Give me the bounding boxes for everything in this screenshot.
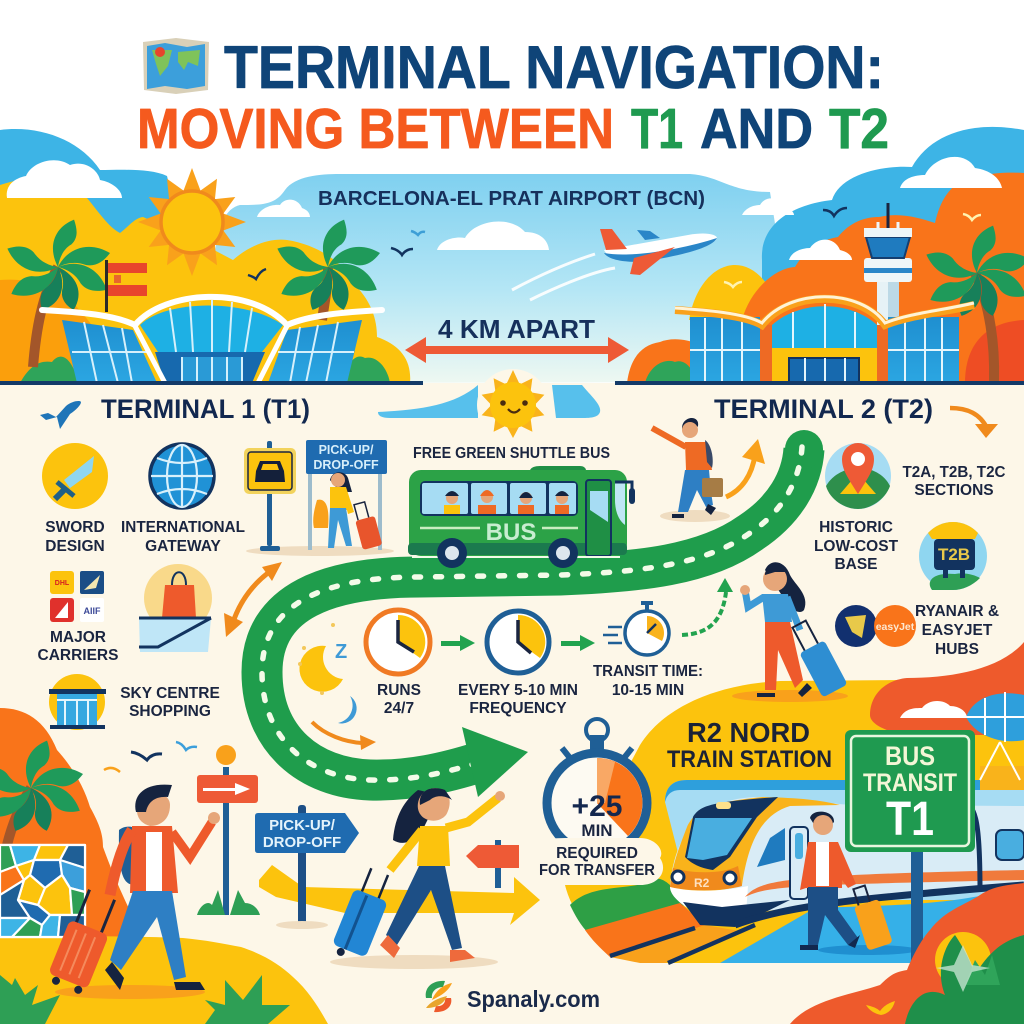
yellow arrow ground [259, 865, 540, 925]
globe dome [966, 692, 1024, 780]
small arrow sign [466, 840, 519, 888]
arrowhead: orange t2 [975, 424, 998, 438]
map icon [143, 38, 209, 94]
pick-up sign top: PICK-UP/ [319, 443, 374, 457]
label: sword design: DESIGN [45, 538, 105, 555]
sky panel [0, 127, 1024, 383]
title: TERMINAL NAVIGATION: [224, 34, 884, 101]
arrow: orange curve [726, 455, 755, 497]
palm bottom left [0, 737, 84, 845]
icon: small plane [40, 401, 81, 429]
bottom right foliage [790, 883, 1024, 1024]
location icon [825, 443, 891, 509]
label: shuttle: FREE GREEN SHUTTLE BUS [413, 445, 610, 462]
label: required [528, 821, 663, 885]
pick-up sign bottom [255, 805, 359, 929]
airplane [512, 229, 717, 300]
birds bottom [104, 742, 197, 772]
label: historic low-cost base: LOW-COST [814, 538, 899, 555]
international gateway icon [150, 444, 214, 508]
title: T1 [631, 97, 683, 161]
label: historic low-cost base: HISTORIC [819, 519, 893, 536]
logo: Spanaly.com [467, 986, 600, 1012]
label: major carriers [38, 629, 118, 664]
label: historic low-cost base: BASE [834, 556, 878, 573]
airline logos: easyJet [876, 621, 915, 633]
label: sword design [45, 519, 105, 555]
heading: r2 nord: R2 NORD [687, 717, 810, 748]
clock 24/7 [366, 610, 430, 674]
label: sky centre [120, 685, 220, 720]
stopwatch [603, 601, 669, 655]
label: runs 24/7: RUNS [377, 682, 421, 699]
icon: train: R2 [694, 876, 710, 890]
title: T2 [829, 97, 889, 161]
sky centre icon [49, 674, 106, 730]
bus transit sign: T1 [886, 793, 934, 846]
icon: bus: BUS [486, 519, 536, 546]
train panel [565, 642, 1024, 963]
label: international gateway: GATEWAY [145, 538, 222, 555]
stopwatch large [547, 719, 647, 853]
label: sword design: SWORD [45, 519, 105, 536]
label: runs 24/7 [377, 682, 421, 717]
moon icon: Z [335, 641, 347, 663]
title: MOVING BETWEEN [137, 97, 614, 161]
flag [105, 260, 147, 312]
person pointing top [652, 418, 730, 522]
label: frequency: EVERY 5-10 MIN [458, 682, 578, 699]
taxi sign [244, 441, 394, 556]
subtitle: BARCELONA-EL PRAT AIRPORT (BCN) [318, 188, 705, 210]
stopwatch large: +25 [572, 790, 622, 823]
arrow: green two [561, 635, 595, 651]
label: sky centre: SHOPPING [129, 703, 211, 720]
terminal 1 building [0, 297, 423, 385]
arrow: double orange [224, 562, 282, 637]
arrowhead: moon curve [360, 735, 376, 750]
heading: r2 nord [667, 717, 832, 773]
label: frequency [458, 682, 578, 717]
label: distance [405, 314, 629, 363]
heading: terminal 2: TERMINAL 2 (T2) [714, 394, 933, 424]
terminal 2 building [615, 203, 1024, 385]
label: hubs: EASYJET [922, 622, 993, 639]
arrow: green [441, 635, 475, 651]
label: sections [902, 464, 1006, 499]
label: distance: 4 KM APART [438, 314, 595, 344]
clock frequency [487, 611, 549, 673]
green road [262, 447, 804, 780]
label: sky centre: SKY CENTRE [120, 685, 220, 702]
person near train [800, 812, 918, 955]
carrier logos: DHL [55, 580, 70, 587]
t2b sign icon: T2B [938, 545, 970, 564]
icon: mosaic [0, 845, 85, 937]
left hills [0, 178, 410, 383]
pick-up sign bottom: PICK-UP/ [269, 817, 336, 834]
right hills [627, 173, 1024, 383]
label: hubs: RYANAIR & [915, 603, 999, 620]
arrowhead: road [462, 727, 528, 797]
arrow sign [197, 745, 260, 915]
carrier logos: AIIF [84, 606, 101, 616]
label: required: REQUIRED [556, 845, 638, 862]
label: required: FOR TRANSFER [539, 862, 655, 879]
label: major carriers: CARRIERS [38, 647, 118, 664]
label: sections: SECTIONS [914, 482, 994, 499]
moon icon [298, 623, 357, 723]
label: required: MIN [581, 821, 613, 840]
bus transit sign [845, 730, 975, 963]
arrowhead: orange curve [742, 439, 765, 464]
person centre with blue suitcase [329, 788, 505, 969]
label: major carriers: MAJOR [50, 629, 106, 646]
bottom left hills [0, 708, 328, 1024]
person left with red suitcase [45, 785, 220, 999]
label: transit time: TRANSIT TIME: [593, 663, 703, 680]
shopping icon [139, 564, 212, 652]
arrow: dashed green [682, 578, 733, 635]
carrier logos [50, 571, 104, 622]
airline logos [835, 605, 916, 647]
person with suitcase top [313, 472, 382, 550]
palm trees top [4, 216, 1024, 381]
label: international gateway: INTERNATIONAL [121, 519, 245, 536]
icon: bus [408, 466, 635, 568]
bus transit sign: TRANSIT [863, 769, 957, 797]
label: runs 24/7: 24/7 [384, 700, 414, 717]
pick-up sign top: DROP-OFF [313, 458, 379, 472]
label: transit time [593, 663, 703, 699]
logo [426, 981, 600, 1012]
birds top [248, 208, 981, 287]
label: hubs [915, 603, 999, 658]
label: hubs: HUBS [935, 641, 979, 658]
arrow: orange t2 [950, 408, 987, 428]
label: historic low-cost base [814, 519, 899, 573]
pick-up sign bottom: DROP-OFF [263, 834, 341, 851]
sword design icon [42, 443, 108, 509]
heading: r2 nord: TRAIN STATION [667, 746, 832, 773]
title: AND [700, 97, 813, 161]
water and smiling sun [378, 369, 600, 441]
pick-up sign top [306, 440, 387, 550]
icon: train [670, 797, 1024, 927]
label: international gateway [121, 519, 245, 555]
heading: terminal 1: TERMINAL 1 (T1) [101, 394, 310, 424]
label: frequency: FREQUENCY [469, 700, 567, 717]
title band [0, 0, 1024, 383]
person with blue suitcase [732, 562, 848, 702]
label: transit time: 10-15 MIN [612, 682, 684, 699]
title [137, 34, 889, 161]
icon: sun [138, 168, 246, 276]
bus transit sign: BUS [885, 741, 935, 771]
clouds [7, 157, 1002, 260]
arrow: moon curve [312, 722, 362, 743]
t2b sign icon [919, 522, 987, 590]
label: sections: T2A, T2B, T2C [902, 464, 1006, 481]
